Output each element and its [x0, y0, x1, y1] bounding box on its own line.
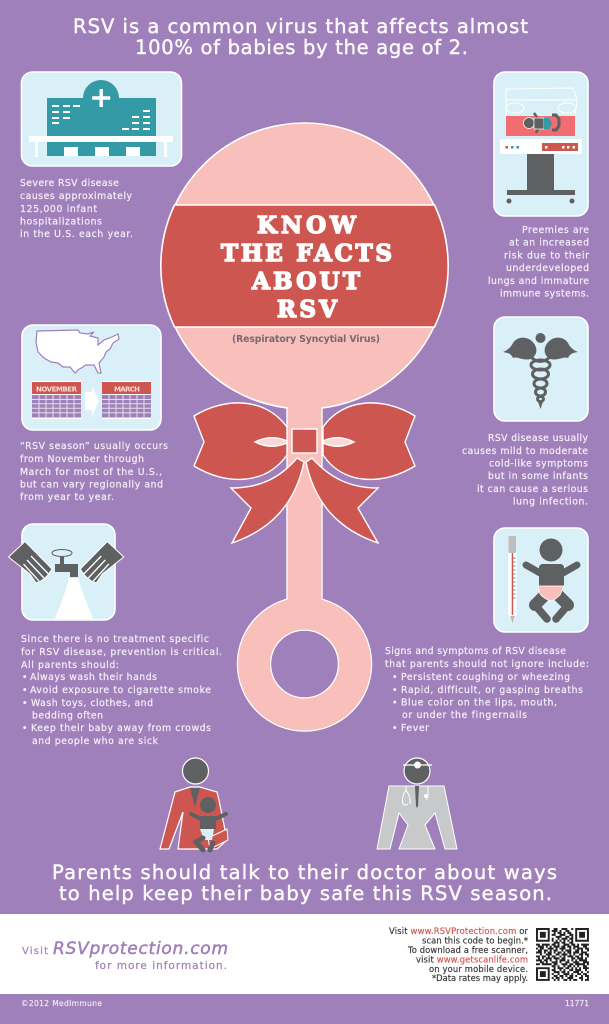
- rattle ring: [254, 614, 355, 714]
- text: prevention: [21, 634, 222, 747]
- text: season: [20, 441, 168, 503]
- footer: website callout: for more information.: [95, 960, 227, 972]
- job code: 11771: [565, 999, 589, 1008]
- closing message: to help keep their baby safe this RSV season.: [59, 882, 552, 905]
- text: symptoms severity: RSV disease usually: [488, 433, 588, 444]
- footer: website callout: RSVprotection.com: [53, 939, 228, 959]
- panel: symptoms: [385, 528, 589, 734]
- icon: right hand: [80, 542, 124, 583]
- icon: US map: [36, 330, 119, 373]
- calendar: March: [102, 381, 151, 419]
- text: prevention: Avoid exposure to cigarette smoke: [30, 685, 211, 696]
- title: 100% of babies by the age of 2.: [135, 36, 468, 59]
- text: season: from November through: [20, 454, 144, 465]
- icon: hospital: [29, 80, 173, 157]
- text: symptoms severity: lung infection.: [513, 496, 588, 508]
- rattle head: [162, 123, 448, 409]
- text: prevention: for RSV disease, prevention is critical.: [21, 647, 222, 658]
- footer band: [0, 914, 609, 994]
- panel: caduceus: [462, 317, 588, 508]
- text: preemies: [488, 225, 589, 300]
- text: prevention: and people who are sick: [32, 736, 159, 747]
- text: symptoms list: or under the fingernails: [402, 710, 527, 721]
- text: symptoms list: •: [392, 698, 397, 708]
- icon: caduceus: [503, 333, 578, 409]
- text: prevention: •: [22, 698, 27, 709]
- text: symptoms list: [385, 646, 589, 734]
- text: prevention: Always wash their hands: [30, 672, 157, 683]
- text: prevention: Keep their baby away from crowds: [31, 723, 211, 734]
- text: season: March for most of the U.S.,: [20, 467, 162, 478]
- footer: scan instructions: *Data rates may apply.: [432, 973, 528, 983]
- text: preemies: immune systems.: [500, 288, 589, 300]
- copyright: ©2012 MedImmune: [21, 999, 102, 1008]
- text: preemies: underdeveloped: [506, 263, 589, 274]
- icon: parent holding baby: [160, 758, 228, 850]
- panel: preemies: [488, 72, 589, 300]
- headline: know the facts: RSV: [277, 296, 338, 323]
- arrow: [85, 386, 99, 416]
- text: symptoms list: that parents should not ignore include:: [385, 659, 589, 670]
- title: RSV is a common virus that affects almost: [73, 15, 528, 38]
- text: preemies: risk due to their: [504, 250, 589, 262]
- closing message: [52, 861, 557, 905]
- footer: scan instructions: on your mobile device.: [429, 964, 528, 974]
- text: symptoms list: •: [392, 723, 397, 734]
- footer: scan instructions: visit www.getscanlife.com: [416, 954, 528, 964]
- text: symptoms list: Signs and symptoms of RSV disease: [385, 646, 566, 657]
- panel: prevention: [8, 524, 222, 747]
- text: symptoms list: Persistent coughing or wheezing: [401, 672, 570, 683]
- rattle: [161, 123, 448, 714]
- rattle band: [161, 205, 448, 327]
- text: symptoms list: Rapid, difficult, or gasping breaths: [401, 685, 583, 696]
- headline: know the facts: [221, 212, 392, 323]
- text: hospitalizations: Severe RSV disease: [20, 178, 119, 189]
- text: prevention: bedding often: [32, 710, 103, 722]
- title: [73, 15, 528, 59]
- text: prevention: All parents should:: [21, 660, 119, 671]
- text: symptoms list: •: [392, 672, 397, 683]
- text: hospitalizations: hospitalizations: [20, 216, 102, 228]
- footer: website callout: [22, 939, 228, 972]
- text: symptoms list: •: [392, 685, 397, 696]
- text: prevention: Since there is no treatment specific: [21, 634, 209, 645]
- headline: know the facts: THE FACTS: [221, 240, 392, 267]
- text: symptoms severity: cold-like symptoms: [489, 458, 588, 470]
- text: symptoms list: Blue color on the lips, mouth,: [401, 698, 557, 708]
- text: preemies: lungs and immature: [488, 276, 589, 287]
- text: symptoms severity: but in some infants: [488, 471, 588, 482]
- QR code: [536, 929, 589, 980]
- calendar: March: MARCH: [114, 386, 140, 394]
- footer: scan instructions: Visit www.RSVProtection.com or: [389, 926, 529, 936]
- subtitle: (Respiratory Syncytial Virus): [232, 334, 380, 345]
- text: hospitalizations: causes approximately: [20, 191, 132, 202]
- text: hospitalizations: in the U.S. each year.: [20, 229, 133, 240]
- footer: website callout: Visit: [22, 946, 48, 957]
- text: symptoms severity: [462, 433, 588, 508]
- text: symptoms list: Fever: [401, 723, 429, 734]
- bow: [194, 403, 415, 543]
- text: symptoms severity: it can cause a serious: [477, 484, 588, 495]
- icon: baby: [526, 538, 577, 619]
- footer: scan instructions: scan this code to begin.*: [422, 936, 528, 946]
- text: symptoms severity: causes mild to moderate: [462, 446, 588, 457]
- calendar: November: [32, 381, 81, 419]
- text: prevention: •: [22, 672, 27, 683]
- panel: RSV season: [20, 325, 168, 503]
- rattle handle: [287, 400, 322, 605]
- footer: scan instructions: [389, 926, 529, 983]
- text: prevention: Wash toys, clothes, and: [31, 698, 153, 709]
- icon: thermometer: [508, 536, 516, 625]
- text: hospitalizations: [20, 178, 133, 240]
- icon: water stream: [55, 578, 93, 619]
- text: prevention: •: [22, 685, 27, 696]
- headline: know the facts: KNOW: [257, 212, 357, 239]
- text: preemies: at an increased: [509, 238, 589, 248]
- icon: incubator: [500, 88, 582, 204]
- text: preemies: Preemies are: [522, 225, 589, 236]
- footer: scan instructions: To download a free scanner,: [407, 945, 528, 955]
- headline: know the facts: ABOUT: [251, 268, 360, 295]
- text: prevention: •: [22, 723, 27, 734]
- calendar: November: NOVEMBER: [36, 386, 78, 394]
- panel: hospital: [20, 72, 182, 240]
- text: hospitalizations: 125,000 infant: [20, 204, 97, 215]
- text: season: but can vary regionally and: [20, 480, 163, 490]
- text: season: “RSV season” usually occurs: [20, 441, 168, 452]
- icon: premature baby: [524, 113, 559, 133]
- icon: faucet: [52, 550, 78, 577]
- icon: doctor: [377, 758, 457, 849]
- closing message: Parents should talk to their doctor about ways: [52, 861, 557, 884]
- text: season: from year to year.: [20, 492, 114, 503]
- icon: left hand: [8, 542, 52, 583]
